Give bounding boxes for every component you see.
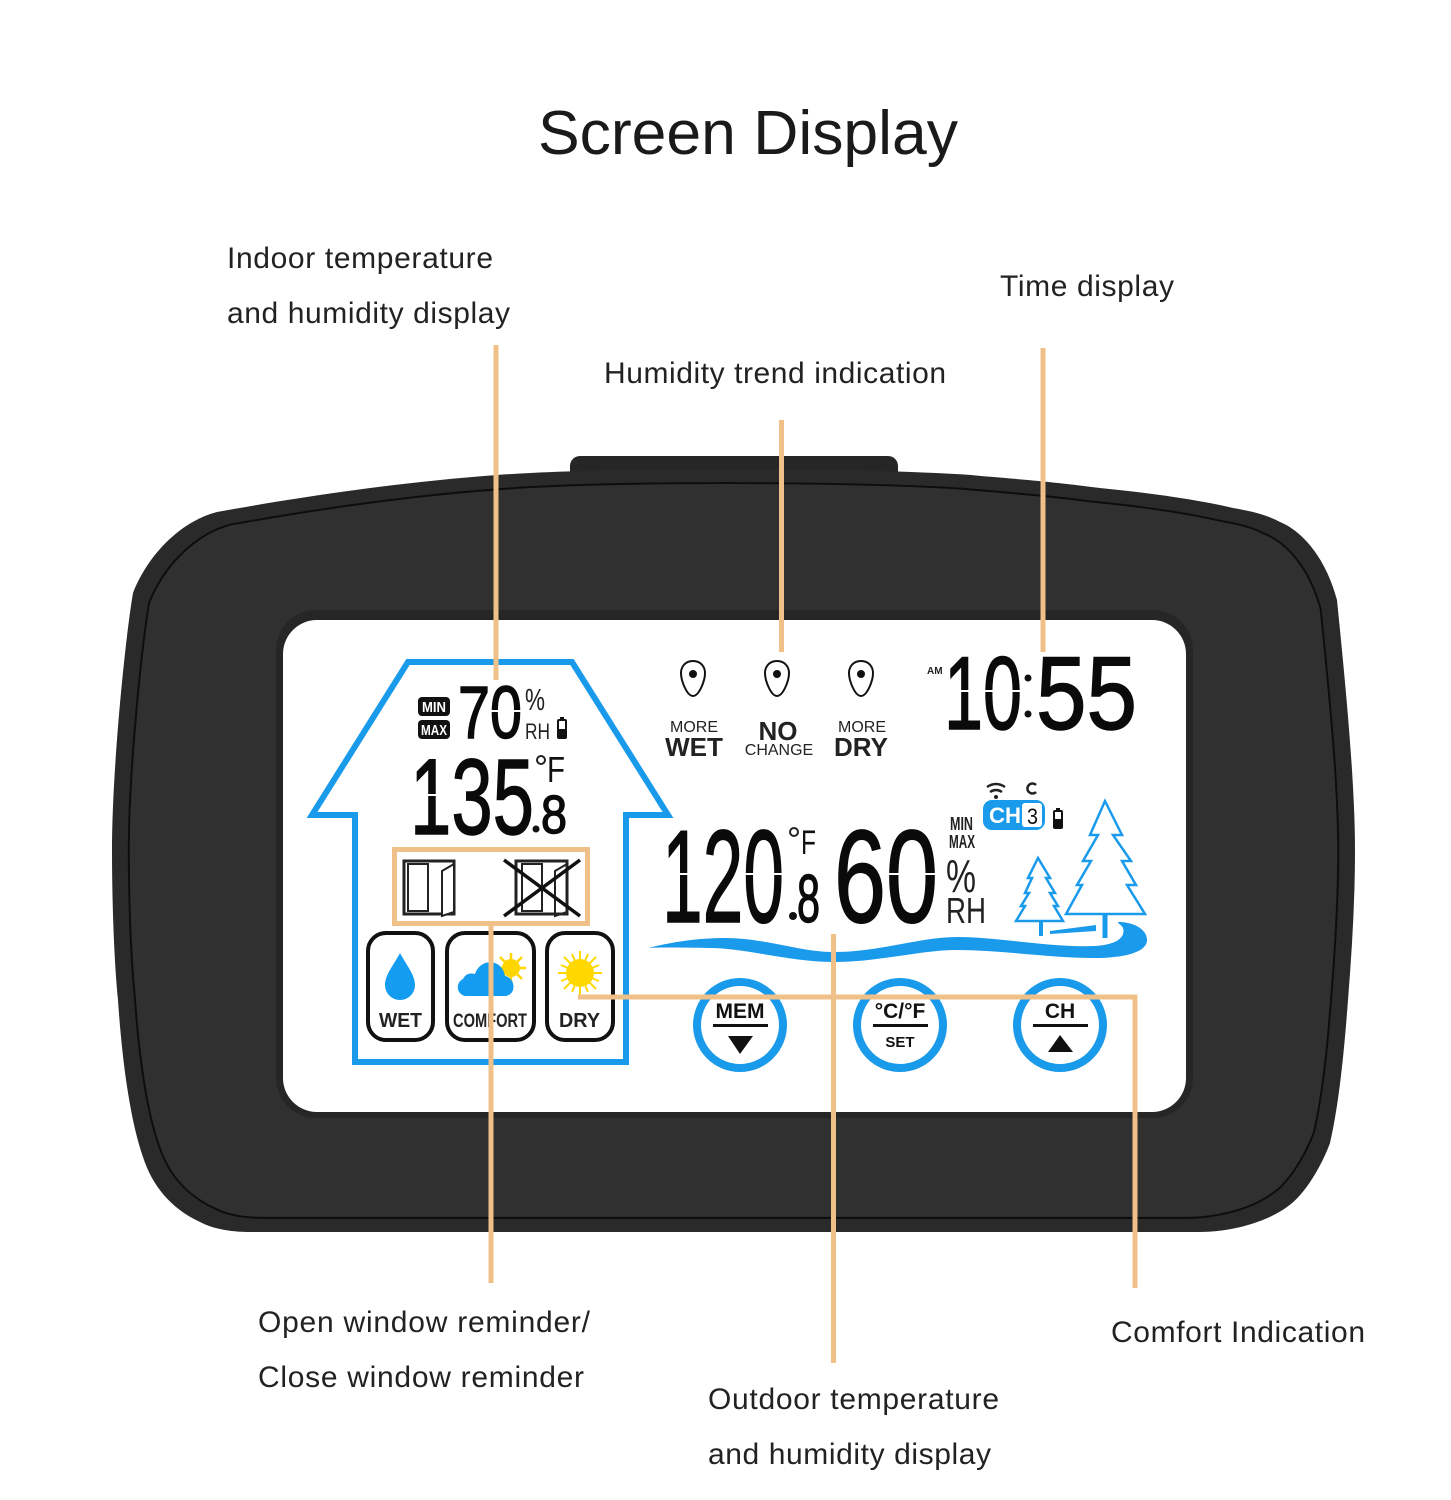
trend: more dry: DRY: [834, 732, 888, 762]
label: outdoor temperature and humidity: Outdoor temperature: [708, 1383, 999, 1416]
outdoor humidity value: MIN: [950, 814, 973, 834]
channel indicator: [983, 784, 1045, 830]
time value: 55: [1036, 636, 1137, 752]
outdoor temperature value: 8: [797, 861, 820, 937]
channel indicator: 3: [1027, 804, 1038, 829]
label: window reminder: Close window reminder: [258, 1361, 584, 1394]
indoor battery icon: [558, 717, 566, 739]
window reminder box: [394, 850, 588, 924]
label: window reminder: [258, 1306, 591, 1394]
button: CH up: [1017, 982, 1103, 1068]
button: CH up: CH: [1045, 1000, 1075, 1023]
outdoor temperature value: 120: [662, 803, 784, 950]
trend: more wet: MORE: [670, 719, 718, 736]
dry status: DRY: [559, 1010, 601, 1032]
screen bezel: [276, 610, 1193, 1118]
label: indoor temperature and humidity: Indoor temperature: [227, 242, 493, 275]
indoor min max chips: MIN: [422, 699, 446, 716]
indoor humidity value: RH: [525, 719, 550, 744]
button: unit set: [857, 982, 943, 1068]
button: MEM down: [697, 982, 783, 1068]
title: Screen Display: [538, 99, 958, 168]
trend: more wet: WET: [665, 732, 723, 762]
wet status: [368, 933, 433, 1040]
time value: 10: [944, 636, 1022, 752]
button: unit set: SET: [885, 1034, 915, 1051]
indoor min max chips: [418, 697, 450, 739]
leader lines: [491, 345, 1135, 1363]
house outline: [312, 662, 668, 1062]
label: time display: Time display: [1000, 270, 1174, 303]
icon: trees: [1016, 801, 1145, 938]
label: indoor temperature and humidity: and humidity display: [227, 297, 510, 330]
label: indoor temperature and humidity: [227, 242, 510, 330]
time value: AM: [927, 666, 943, 677]
indoor temperature value: F: [547, 749, 565, 790]
comfort status: [447, 933, 534, 1040]
indoor temperature value: 8: [541, 785, 567, 845]
outdoor temperature value: F: [801, 824, 816, 862]
dry status: [547, 933, 613, 1040]
label: outdoor temperature and humidity: [708, 1383, 999, 1471]
scenery: water swoosh: [648, 922, 1147, 962]
label: outdoor temperature and humidity: and humidity display: [708, 1438, 991, 1471]
label: comfort indication: Comfort Indication: [1111, 1316, 1365, 1349]
trend: no change: [745, 661, 813, 759]
button: unit set: °C/°F: [875, 1000, 925, 1023]
outdoor humidity value: %: [946, 850, 976, 902]
outdoor battery icon: [1054, 808, 1062, 828]
button: MEM down: MEM: [716, 1000, 764, 1023]
icon: close window crossed: [504, 860, 580, 916]
indoor min max chips: MAX: [421, 722, 447, 739]
label: window reminder: Open window reminder/: [258, 1306, 591, 1339]
icon: open window: [404, 861, 454, 916]
comfort status: COMFORT: [453, 1011, 527, 1032]
trend: no change: NO: [758, 716, 798, 746]
outdoor humidity value: MAX: [949, 832, 975, 852]
indoor humidity value: 70: [458, 671, 522, 754]
wet status: WET: [379, 1010, 422, 1032]
trend: more dry: MORE: [838, 719, 886, 736]
outdoor humidity value: 60: [834, 803, 938, 950]
indoor humidity value: %: [525, 682, 545, 717]
outdoor humidity value: RH: [946, 890, 986, 931]
indoor temperature value: 135: [410, 736, 534, 857]
device body: [112, 456, 1355, 1232]
trend: no change: CHANGE: [745, 742, 813, 759]
screen: [283, 620, 1186, 1112]
trend: more dry: [834, 661, 888, 762]
channel indicator: CH: [989, 803, 1021, 828]
trend: more wet: [665, 661, 723, 762]
label: humidity trend: Humidity trend indication: [604, 357, 946, 390]
time value: [927, 636, 1137, 752]
